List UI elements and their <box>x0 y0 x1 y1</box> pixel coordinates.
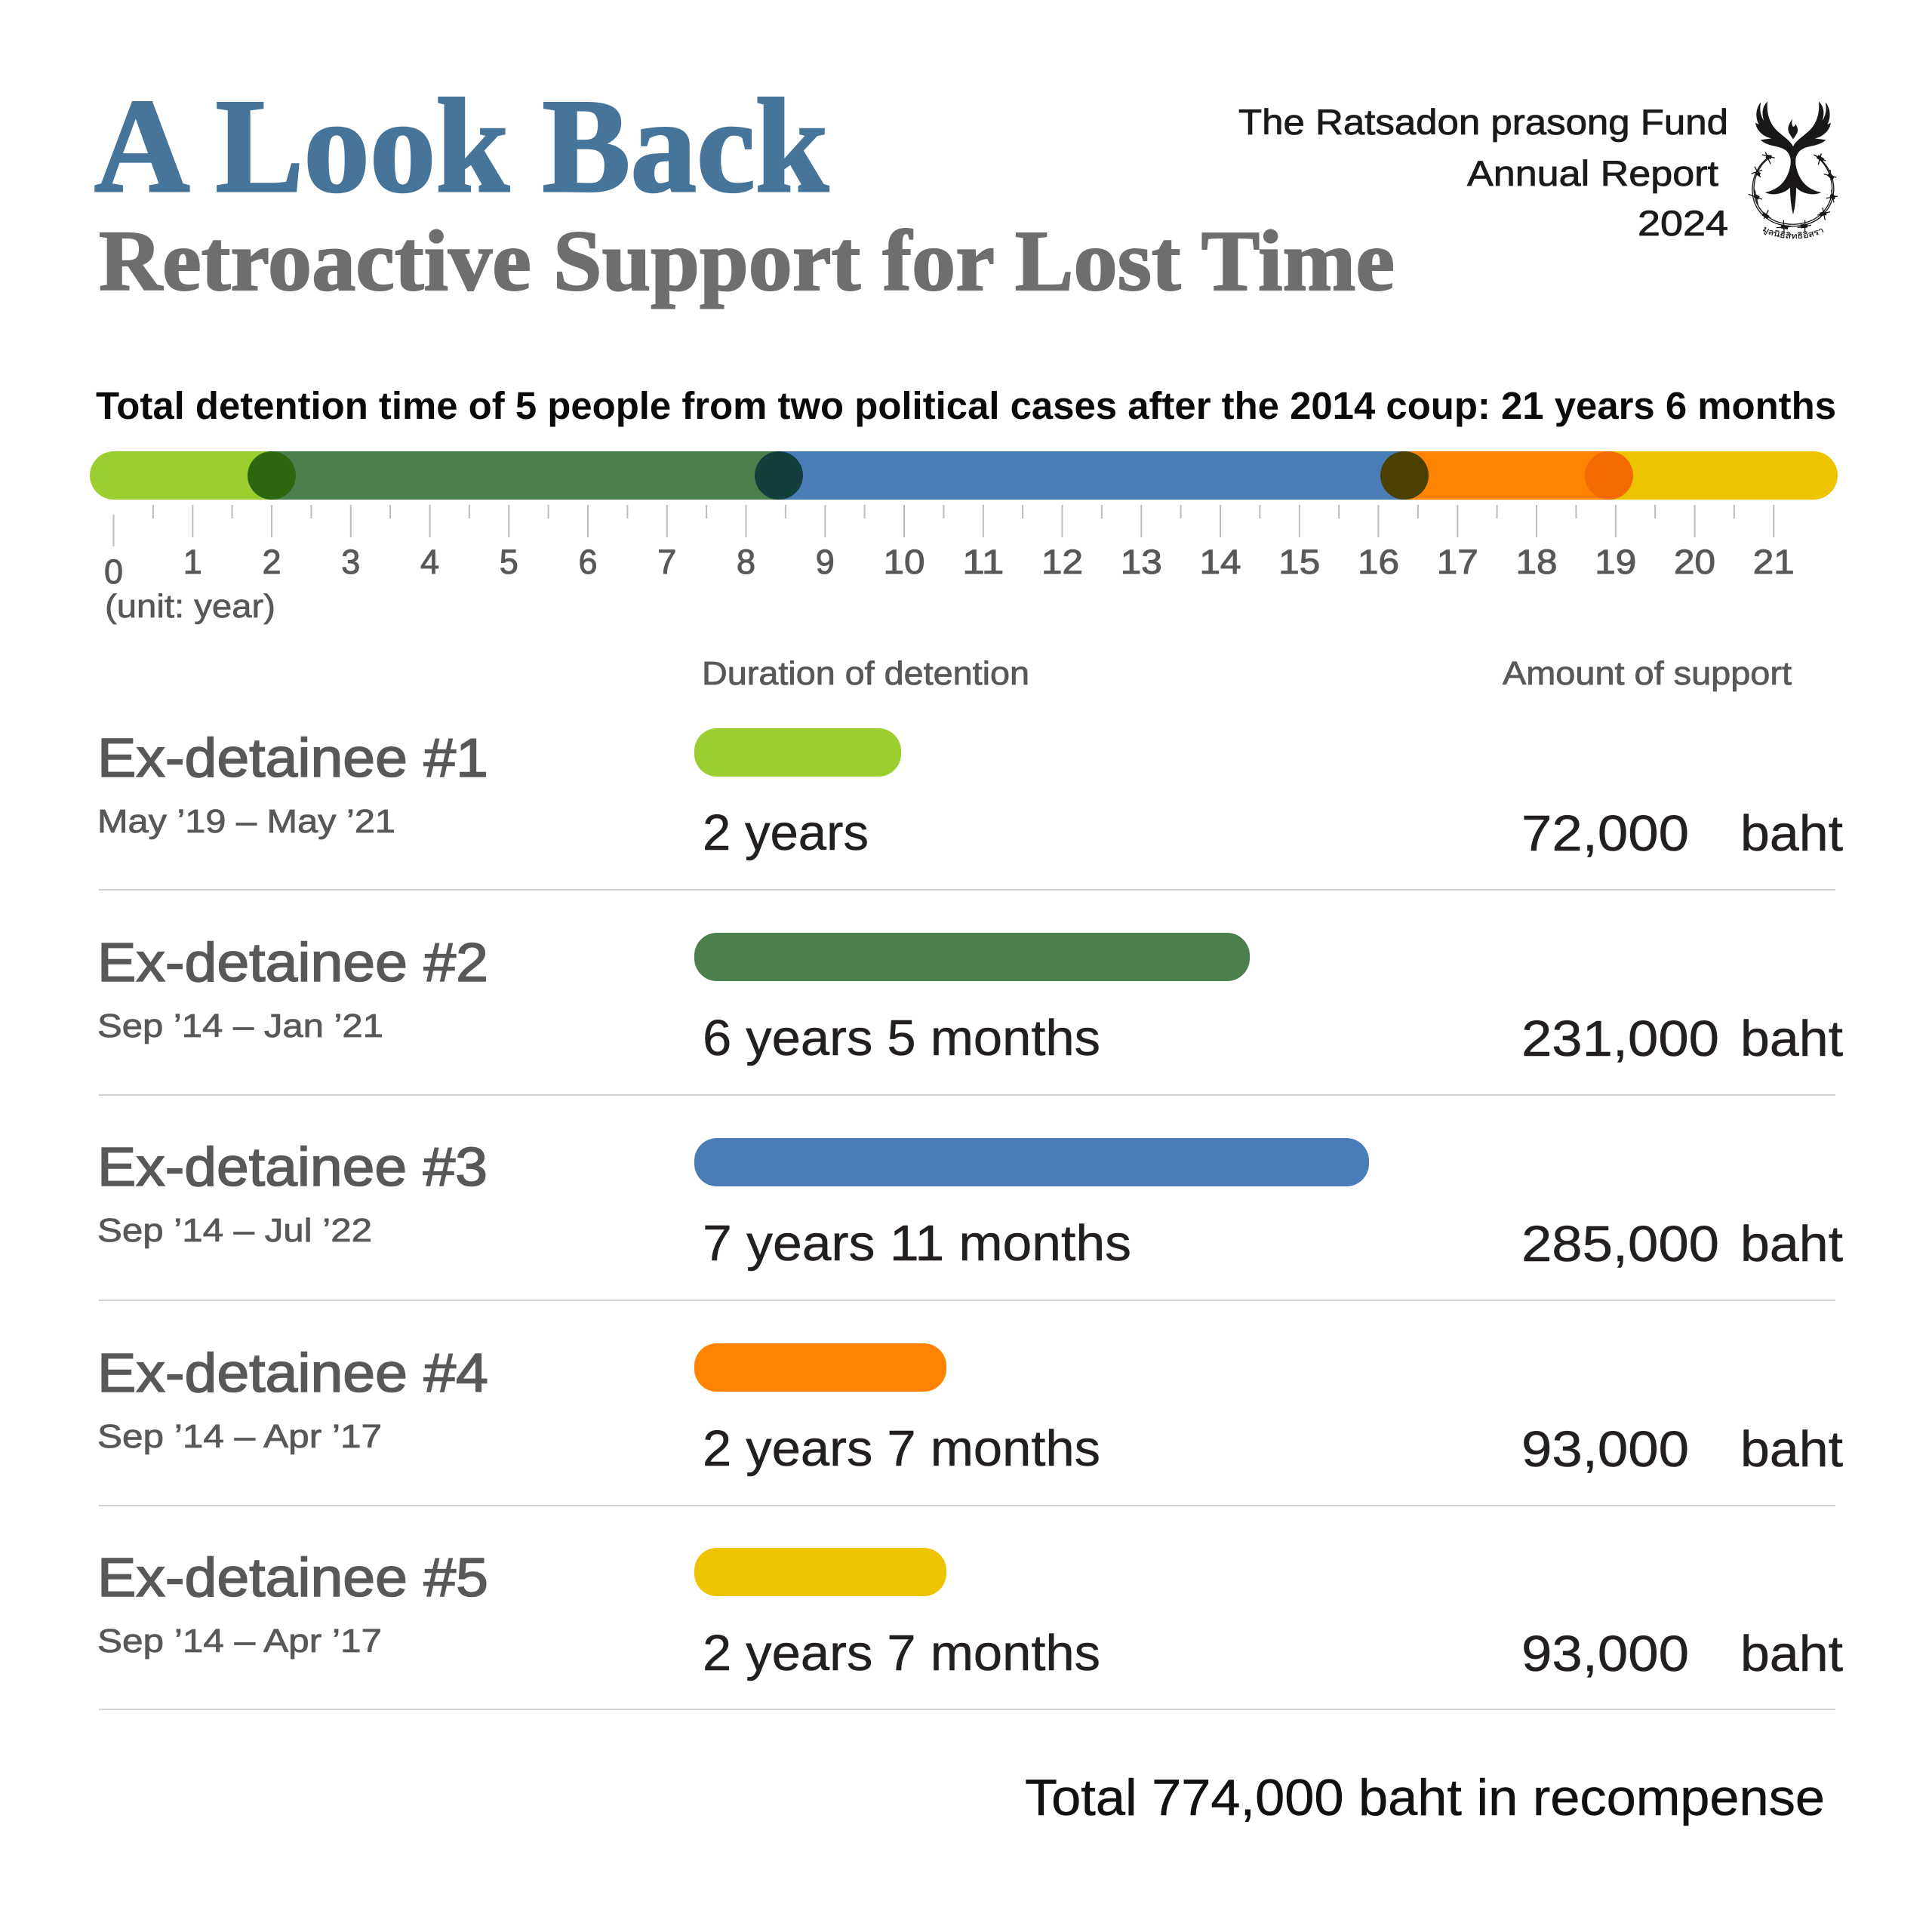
timeline axis ticks <box>113 505 1774 546</box>
row: ex-detainee 1: Ex-detainee #1 <box>97 728 488 789</box>
axis labels: 2 <box>262 543 281 581</box>
axis labels: 8 <box>737 543 755 581</box>
row: ex-detainee 2 <box>97 933 1843 1095</box>
row: ex-detainee 2: Sep ’14 – Jan ’21 <box>97 1008 383 1044</box>
icon: fund logo: มูลนิธิสิทธิอิสรา <box>1763 226 1823 238</box>
row: ex-detainee 3: Ex-detainee #3 <box>97 1137 488 1198</box>
axis labels: 19 <box>1595 543 1636 581</box>
row: ex-detainee 2: 6 years 5 months <box>703 1010 1100 1066</box>
axis labels: 1 <box>183 543 202 581</box>
row: ex-detainee 4: baht <box>1740 1421 1843 1478</box>
subtitle: Retroactive Support for Lost Time <box>99 213 1395 309</box>
row: ex-detainee 3 <box>97 1137 1843 1300</box>
axis unit note: (unit: year) <box>105 588 275 625</box>
axis labels: 18 <box>1515 543 1558 581</box>
row: ex-detainee 5: 2 years 7 months <box>703 1625 1100 1681</box>
row: ex-detainee 1: 72,000 <box>1521 805 1689 862</box>
row: ex-detainee 1: May ’19 – May ’21 <box>97 803 395 840</box>
axis labels: 6 <box>578 543 598 581</box>
row: ex-detainee 4: Ex-detainee #4 <box>97 1343 488 1404</box>
row: ex-detainee 4: 2 years 7 months <box>703 1420 1100 1477</box>
title: A Look Back <box>94 71 829 220</box>
row: ex-detainee 4: 93,000 <box>1521 1421 1689 1478</box>
axis labels: 15 <box>1278 543 1320 581</box>
axis labels: 16 <box>1358 543 1399 581</box>
axis labels: 4 <box>420 543 439 581</box>
row: ex-detainee 4 <box>97 1343 1843 1506</box>
report label: Annual Report <box>1467 153 1718 193</box>
row: ex-detainee 2: baht <box>1740 1011 1843 1067</box>
axis labels: 14 <box>1200 543 1241 581</box>
row: ex-detainee 1: 2 years <box>703 804 869 861</box>
column header: duration: Duration of detention <box>702 655 1029 692</box>
axis labels: 13 <box>1121 543 1162 581</box>
row: ex-detainee 5: Sep ’14 – Apr ’17 <box>97 1623 382 1660</box>
timeline heading: Total detention time of 5 people from two political cases after the 2014 coup: 21 years 6 months <box>96 384 1836 427</box>
row: ex-detainee 5: 93,000 <box>1521 1626 1689 1682</box>
row: ex-detainee 3: 285,000 <box>1521 1216 1719 1272</box>
axis labels: 12 <box>1041 543 1083 581</box>
row: ex-detainee 2: 231,000 <box>1521 1011 1719 1067</box>
row: ex-detainee 4: Sep ’14 – Apr ’17 <box>97 1418 382 1455</box>
column header: amount: Amount of support <box>1503 655 1792 692</box>
stacked timeline bar <box>90 451 1838 500</box>
axis labels: 9 <box>816 543 835 581</box>
row: ex-detainee 5: Ex-detainee #5 <box>97 1548 488 1608</box>
axis labels: 11 <box>962 543 1004 581</box>
axis labels: 3 <box>341 543 360 581</box>
report label <box>1238 102 1728 243</box>
row: ex-detainee 5 <box>97 1548 1843 1709</box>
row: ex-detainee 3: Sep ’14 – Jul ’22 <box>97 1212 372 1249</box>
axis labels: 21 <box>1753 543 1795 581</box>
axis labels: 10 <box>883 543 925 581</box>
report label: The Ratsadon prasong Fund <box>1238 102 1728 142</box>
axis labels <box>104 543 1795 591</box>
axis labels: 20 <box>1674 543 1715 581</box>
row: ex-detainee 3: baht <box>1740 1216 1843 1272</box>
axis labels: 7 <box>657 543 676 581</box>
report label: 2024 <box>1638 203 1728 243</box>
axis labels: 5 <box>500 543 518 581</box>
row: ex-detainee 1 <box>97 728 1843 890</box>
row: ex-detainee 5: baht <box>1740 1626 1843 1682</box>
row: ex-detainee 1: baht <box>1740 805 1843 862</box>
axis labels: 0 <box>104 552 123 591</box>
icon: fund logo <box>1748 101 1838 238</box>
axis labels: 17 <box>1437 543 1478 581</box>
row: ex-detainee 2: Ex-detainee #2 <box>97 933 488 993</box>
row: ex-detainee 3: 7 years 11 months <box>703 1215 1131 1272</box>
total: Total 774,000 baht in recompense <box>1025 1769 1825 1826</box>
